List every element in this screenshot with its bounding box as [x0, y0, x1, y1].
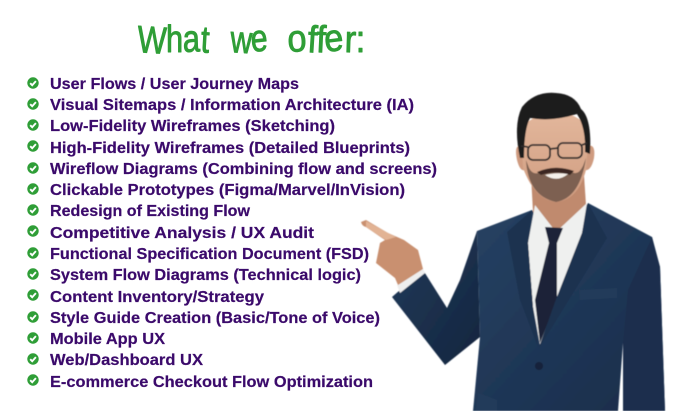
item 6: Clickable Prototypes (Figma/Marvel/InVision) [50, 182, 405, 199]
item 2: Visual Sitemaps / Information Architecture (IA) [50, 97, 414, 114]
shirt [528, 203, 587, 345]
man pointing [361, 93, 665, 411]
item 14: Web/Dashboard UX [50, 352, 204, 369]
item 3: Low-Fidelity Wireframes (Sketching) [50, 118, 335, 135]
tie [535, 227, 563, 343]
item 12: Style Guide Creation (Basic/Tone of Voice) [50, 310, 380, 327]
knuckles [366, 221, 396, 240]
item 8: Competitive Analysis / UX Audit [50, 225, 314, 242]
cuff [397, 269, 425, 293]
title: What [137, 18, 211, 63]
hand [361, 220, 423, 285]
button [535, 362, 543, 370]
item 10: System Flow Diagrams (Technical logic) [50, 267, 361, 284]
checklist [27, 76, 437, 391]
neck [531, 175, 586, 232]
item 9: Functional Specification Document (FSD) [50, 246, 369, 263]
lower pocket [476, 393, 497, 411]
glasses [521, 143, 587, 160]
item 7: Redesign of Existing Flow [50, 203, 251, 220]
item 11: Content Inventory/Strategy [50, 289, 264, 306]
item 15: E-commerce Checkout Flow Optimization [50, 374, 373, 391]
hair [517, 93, 590, 158]
smile [545, 173, 568, 179]
right sleeve [623, 237, 665, 411]
arm sleeve [392, 231, 480, 365]
item 5: Wireflow Diagrams (Combining flow and screens) [50, 161, 437, 178]
ears [516, 146, 594, 170]
item 1: User Flows / User Journey Maps [50, 76, 299, 93]
moustache [537, 168, 574, 175]
lapels [507, 203, 607, 350]
title: we [229, 17, 269, 62]
title: offer: [286, 15, 365, 61]
item 13: Mobile App UX [50, 331, 166, 348]
breast pocket [580, 288, 617, 300]
item 4: High-Fidelity Wireframes (Detailed Blueprints) [50, 140, 410, 157]
torso jacket [473, 203, 665, 411]
face [521, 112, 589, 202]
beard [526, 158, 586, 202]
title [137, 15, 365, 63]
